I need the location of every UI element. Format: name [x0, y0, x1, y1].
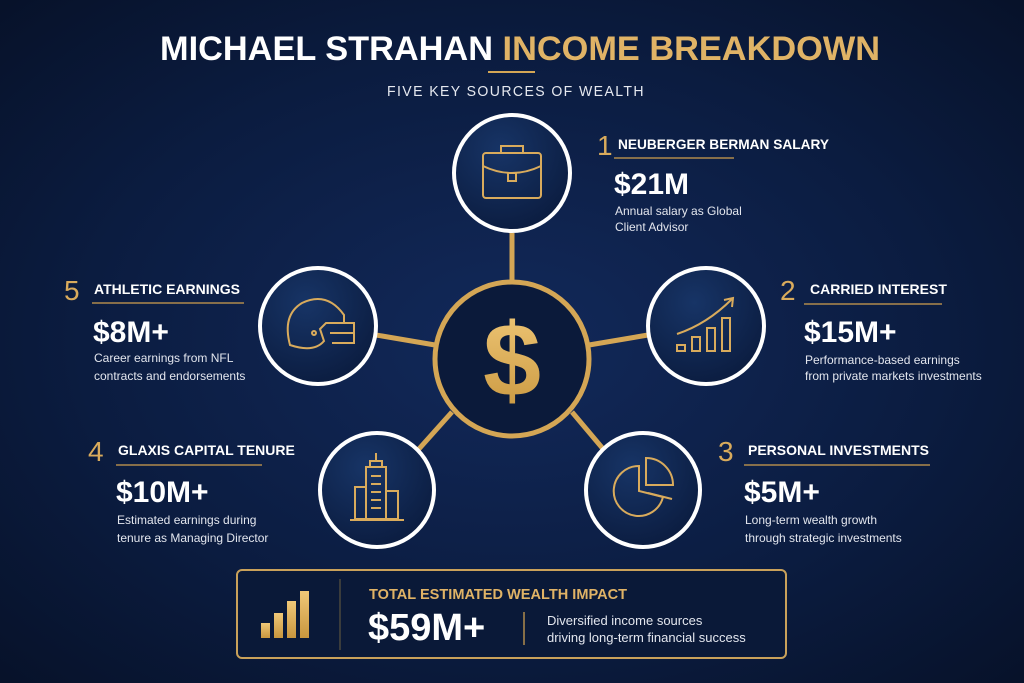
connectors	[376, 233, 648, 450]
text 4: tenure as Managing Director	[117, 531, 268, 545]
total box: $59M+	[368, 607, 485, 649]
text 4: 4	[88, 436, 104, 467]
text 1: 1	[597, 130, 613, 161]
text 2: CARRIED INTEREST	[810, 281, 947, 297]
node 2: growth chart	[648, 268, 764, 384]
total box	[237, 570, 786, 658]
text 2	[780, 275, 982, 383]
text 4: $10M+	[116, 476, 209, 509]
text 5: Career earnings from NFL	[94, 351, 234, 365]
text 3	[718, 436, 930, 545]
title: MICHAEL STRAHAN INCOME BREAKDOWN	[160, 30, 880, 68]
center hub: dollar: $	[483, 303, 541, 419]
subtitle: FIVE KEY SOURCES OF WEALTH	[387, 83, 645, 100]
total box: Diversified income sources	[547, 613, 703, 628]
text 1: NEUBERGER BERMAN SALARY	[618, 136, 830, 152]
node 1: briefcase	[454, 115, 570, 231]
text 2: 2	[780, 275, 796, 306]
center hub: dollar	[435, 282, 589, 436]
text 2: from private markets investments	[805, 369, 982, 383]
text 5: 5	[64, 275, 80, 306]
text 4: GLAXIS CAPITAL TENURE	[118, 442, 295, 458]
text 1	[597, 130, 830, 234]
text 5: $8M+	[93, 316, 169, 349]
text 5	[64, 275, 245, 383]
text 5: contracts and endorsements	[94, 369, 245, 383]
text 3: 3	[718, 436, 734, 467]
node 5: helmet	[260, 268, 376, 384]
total box: driving long-term financial success	[547, 630, 746, 645]
text 3: through strategic investments	[745, 531, 902, 545]
text 2: Performance-based earnings	[805, 353, 960, 367]
text 4: Estimated earnings during	[117, 513, 256, 527]
text 3: Long-term wealth growth	[745, 513, 877, 527]
text 5: ATHLETIC EARNINGS	[94, 281, 240, 297]
text 3: PERSONAL INVESTMENTS	[748, 442, 929, 458]
total box: TOTAL ESTIMATED WEALTH IMPACT	[369, 586, 627, 603]
text 1: $21M	[614, 168, 689, 201]
icon: bars	[261, 591, 309, 638]
text 1: Annual salary as Global	[615, 204, 742, 218]
text 4	[88, 436, 295, 545]
text 3: $5M+	[744, 476, 820, 509]
text 2: $15M+	[804, 316, 897, 349]
node 3: pie chart	[586, 433, 700, 547]
text 1: Client Advisor	[615, 220, 688, 234]
node 4: buildings	[320, 433, 434, 547]
